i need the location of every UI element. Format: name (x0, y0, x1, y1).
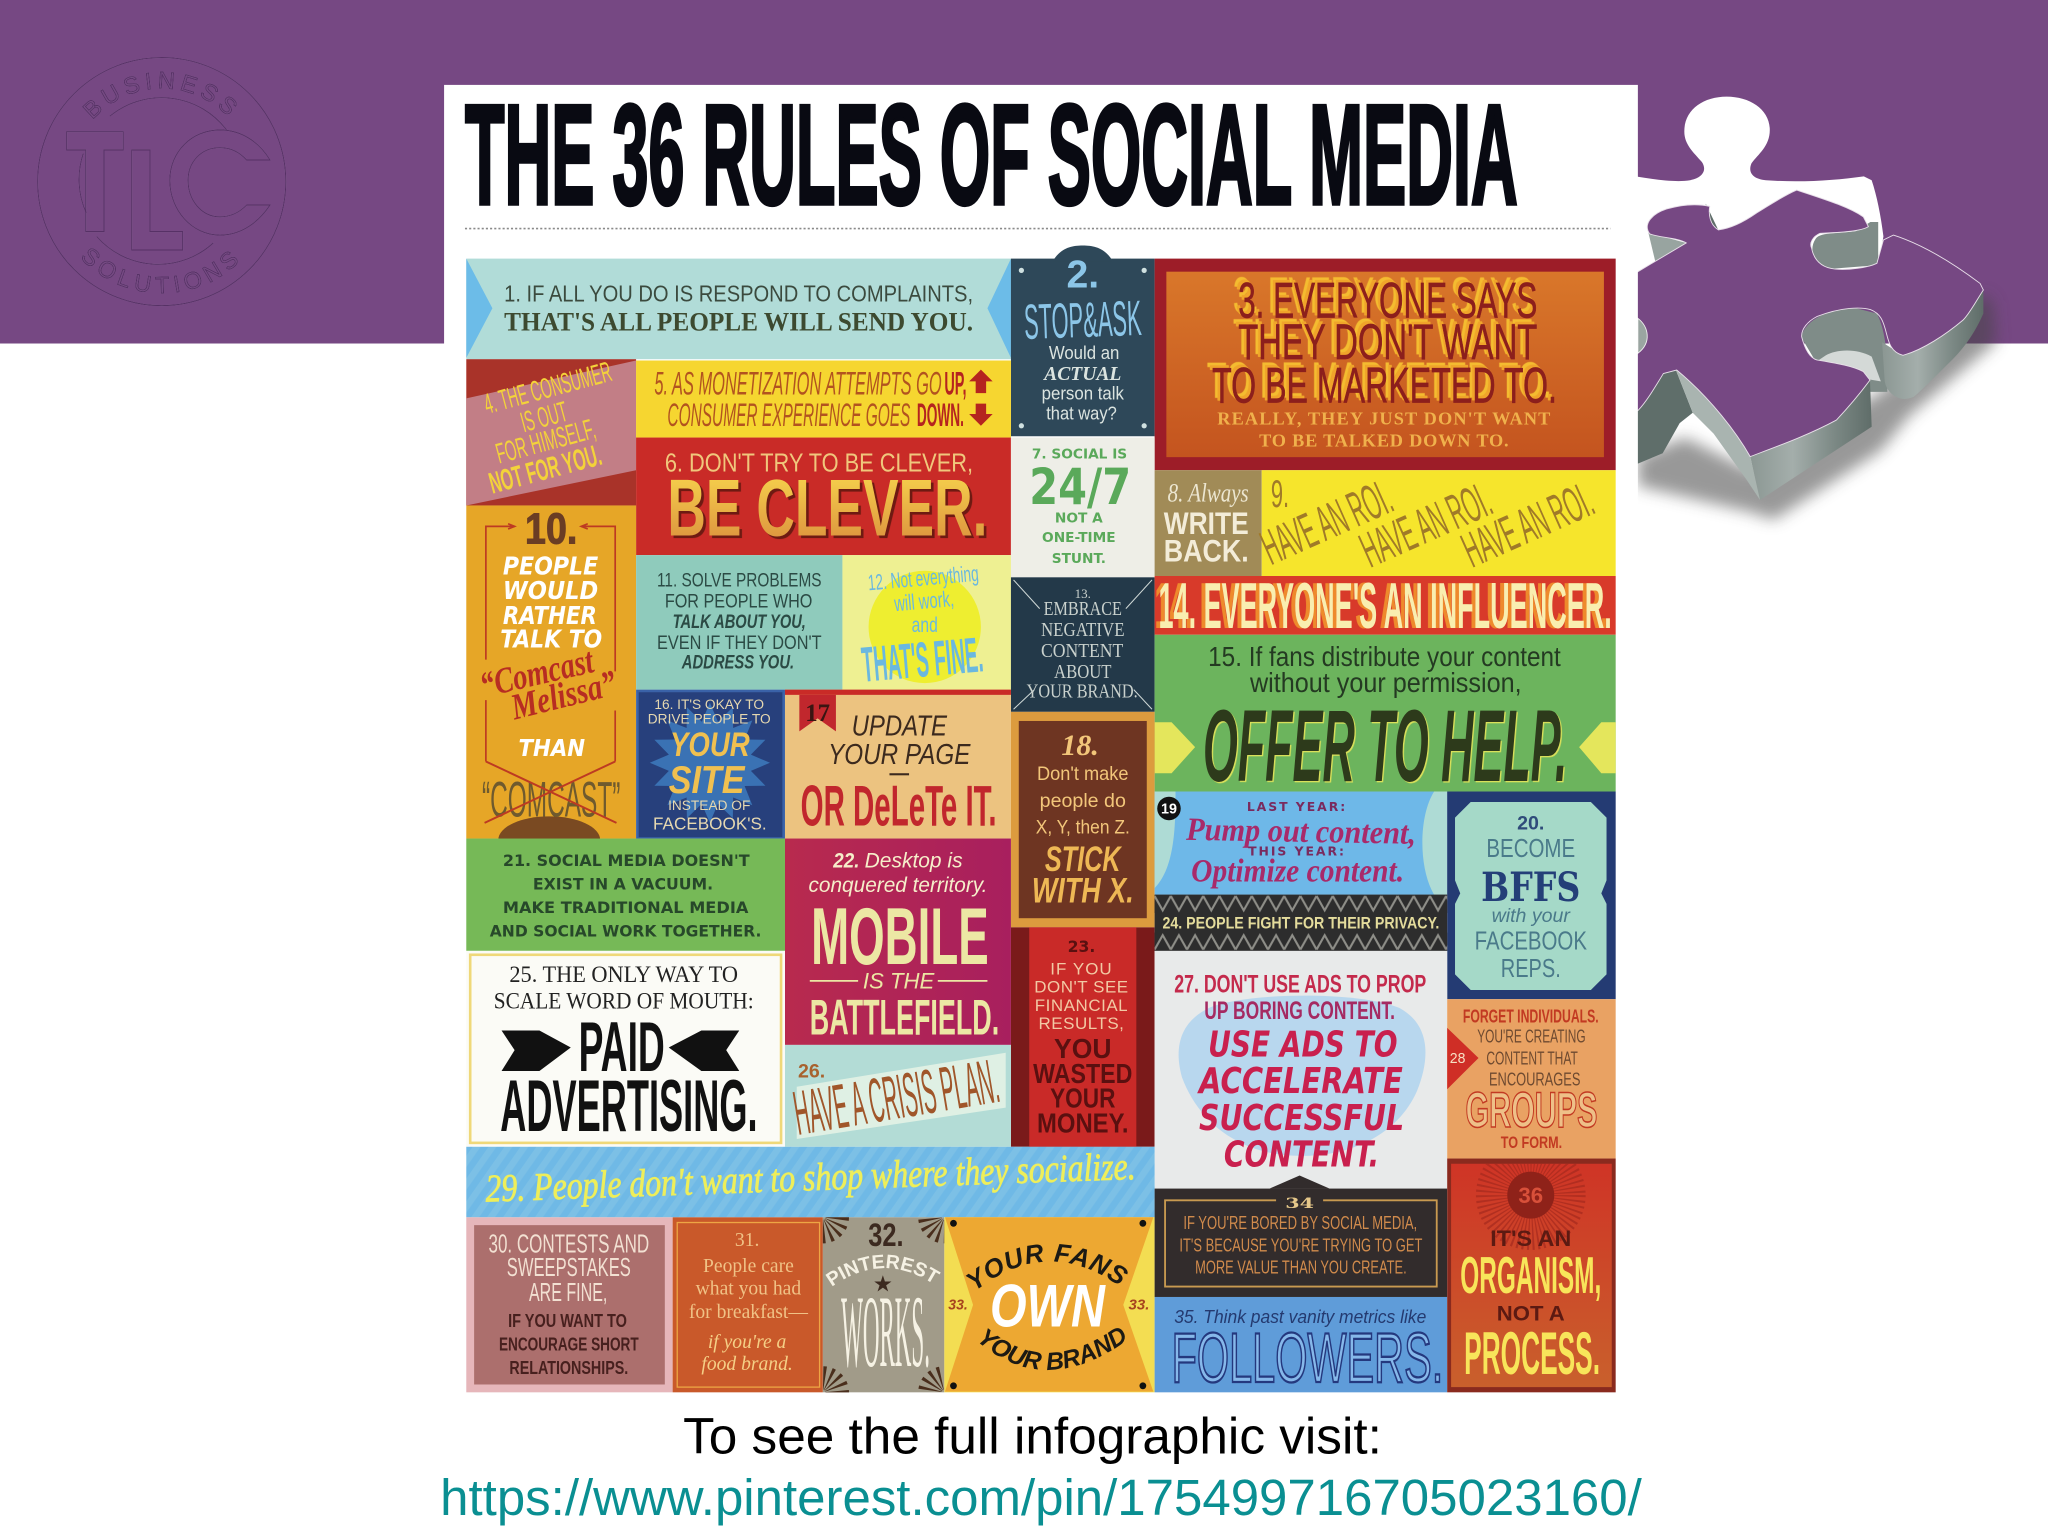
panel: rule 25: PAID (579, 1007, 665, 1086)
logo: embossed TLC Business Solutions: BUSINESS (82, 72, 236, 119)
panel: rule 35: FOLLOWERS. (1172, 1318, 1443, 1397)
panel: rule 21: 21. SOCIAL MEDIA DOESN'T (503, 851, 750, 870)
panel: rule 6 (636, 438, 1011, 555)
panel: rule 28: CONTENT THAT (1486, 1047, 1578, 1068)
panel: rule 7: 7. SOCIAL IS (1032, 446, 1127, 462)
panel: rule 30: IF YOU WANT TO (508, 1310, 627, 1331)
panel: rule 17: UPDATE (852, 710, 948, 742)
panel: rule 33 (944, 1217, 1155, 1392)
icon: 3D puzzle piece (1620, 97, 1996, 520)
panel: rule 11: EVEN IF THEY DON'T (657, 632, 822, 654)
panel: rule 3: 3. EVERYONE SAYS (1238, 272, 1537, 328)
panel: rule 13: 13. (1075, 586, 1091, 601)
panel: rule 9: HAVE AN ROI. (1253, 469, 1401, 576)
panel: rule 32: PINTEREST (826, 1254, 941, 1286)
panel: rule 6: 6. DON'T TRY TO BE CLEVER, (665, 448, 973, 478)
panel: rule 11: 11. SOLVE PROBLEMS (657, 569, 822, 591)
panel: rule 12: will work, (892, 586, 955, 616)
panel: rule 28: FORGET INDIVIDUALS. (1463, 1006, 1599, 1027)
panel: rule 3: TO BE MARKETED TO. (1212, 357, 1557, 413)
white slide panel (444, 85, 1638, 1536)
panel: rule 31: for breakfast— (689, 1302, 808, 1323)
panel: rule 4: 4. THE CONSUMER (481, 356, 615, 421)
panel: rule 10: Melissa” (506, 662, 620, 728)
panel: rule 34: IF YOU'RE BORED BY SOCIAL MEDIA, (1183, 1212, 1417, 1233)
panel: rule 3 (1155, 259, 1616, 470)
panel: rule 21 (466, 839, 785, 951)
panel: rule 21: AND SOCIAL WORK TOGETHER. (490, 921, 761, 940)
panel: rule 10: “COMCAST” (482, 771, 620, 827)
panel: rule 22: IS THE (863, 969, 935, 994)
panel: rule 18 (1011, 712, 1155, 927)
panel: rule 22: 22. (832, 849, 859, 872)
panel: rule 11: ADDRESS YOU. (681, 652, 794, 674)
panel: rule 16: INSTEAD OF (668, 798, 750, 813)
panel: rule 22: conquered territory. (808, 874, 987, 897)
text: OFFER TO HELP. (1203, 689, 1567, 803)
panel: rule 33: 33. (1128, 1296, 1149, 1313)
panel: rule 16: DRIVE PEOPLE TO (648, 712, 771, 727)
panel: rule 2: ACTUAL (1042, 364, 1121, 385)
panel: rule 2: that way? (1046, 402, 1117, 423)
panel: rule 2: 2. (1066, 253, 1099, 296)
panel: rule 2: Would an (1049, 342, 1119, 363)
panel: rule 18: 18. (1061, 729, 1099, 762)
panel: rule 28: TO FORM. (1501, 1133, 1562, 1152)
panel: rule 35: 35. Think past vanity metrics like (1174, 1306, 1426, 1327)
panel: rule 19: THIS YEAR: (1248, 844, 1346, 859)
panel: rule 27 (1155, 951, 1447, 1189)
panel: rule 36: IT'S AN (1490, 1226, 1571, 1251)
panel: rule 28: GROUPS (1465, 1082, 1597, 1138)
panel: rule 30: 30. CONTESTS AND (488, 1229, 649, 1259)
panel: rule 8: 8. Always (1168, 479, 1249, 508)
panel: rule 27: USE ADS TO (1208, 1025, 1398, 1066)
panel: rule 25 (466, 951, 785, 1147)
purple header band (0, 0, 2048, 344)
panel: rule 10: TALK TO (500, 624, 602, 653)
panel: rule 23: YOU (1054, 1033, 1112, 1064)
panel: rule 23: IF YOU (1050, 959, 1113, 978)
panel: rule 10: WOULD (503, 576, 598, 605)
panel: rule 10: PEOPLE (503, 552, 598, 581)
panel: rule 31: 31. (735, 1230, 759, 1251)
logo: embossed TLC Business Solutions (37, 57, 286, 306)
panel: rule 9 (1253, 469, 1616, 578)
panel: rule 22: BATTLEFIELD. (810, 989, 999, 1045)
panel: rule 10: THAN (519, 734, 585, 762)
panel: rule 9: 9. (1271, 473, 1289, 516)
panel: rule 34: 34 (1285, 1196, 1314, 1212)
panel: rule 23: RESULTS, (1039, 1014, 1124, 1033)
panel: rule 25: 25. THE ONLY WAY TO (509, 962, 738, 988)
panel: rule 10 (466, 505, 636, 840)
panel: rule 20: BECOME (1486, 833, 1575, 863)
poster grid (466, 246, 1616, 1397)
panel: rule 3: TO BE TALKED DOWN TO. (1259, 431, 1509, 451)
panel: rule 17: 17 (805, 700, 830, 727)
panel: rule 4: NOT FOR YOU. (486, 439, 605, 500)
panel: rule 4: FOR HIMSELF, (492, 413, 599, 470)
panel: rule 31: food brand. (701, 1354, 793, 1375)
panel: rule 18: Don't make (1037, 763, 1129, 785)
panel: rule 1: THAT'S ALL PEOPLE WILL SEND YOU. (504, 307, 973, 336)
panel: rule 12 (842, 555, 1011, 693)
panel: rule 28: ENCOURAGES (1489, 1068, 1580, 1089)
panel: rule 7 (1011, 438, 1155, 577)
panel: rule 35 (1155, 1297, 1447, 1397)
panel: rule 19: LAST YEAR: (1247, 799, 1347, 814)
panel: rule 27: CONTENT. (1224, 1134, 1379, 1175)
panel: rule 22 (785, 839, 1011, 1045)
panel: rule 27: UP BORING CONTENT. (1204, 998, 1395, 1025)
panel: rule 30: ARE FINE, (529, 1277, 607, 1307)
panel: rule 19: Optimize content. (1191, 854, 1404, 890)
panel: rule 36 (1447, 1156, 1616, 1392)
panel: rule 17 (785, 690, 1011, 839)
panel: rule 4: IS OUT (517, 396, 571, 439)
panel: rule 11 (636, 555, 842, 690)
poster grid: STOP&ASK (1023, 290, 1142, 350)
logo: embossed TLC Business Solutions: SOLUTIONS (82, 248, 238, 294)
panel: rule 10: “Comcast (476, 639, 598, 705)
panel: rule 8: WRITE (1164, 506, 1249, 541)
panel: rule 30: SWEEPSTAKES (507, 1252, 631, 1282)
panel: rule 23: MONEY. (1037, 1107, 1128, 1138)
panel: rule 16: FACEBOOK'S. (653, 813, 767, 833)
panel: rule 15: without your permission, (1249, 667, 1522, 698)
panel: rule 19: 19 (1161, 802, 1177, 818)
panel: rule 22: MOBILE (811, 892, 989, 982)
panel: rule 8 (1155, 470, 1262, 576)
panel: rule 16: YOUR (670, 726, 750, 764)
panel: rule 29: 29. People don't want to shop where they socialize. (485, 1145, 1136, 1211)
panel: rule 26: 26. (798, 1061, 825, 1083)
panel: rule 5: UP, (944, 364, 967, 401)
panel: rule 26 (785, 1045, 1011, 1149)
panel: rule 2: person talk (1042, 383, 1125, 404)
panel: rule 11: TALK ABOUT YOU, (673, 611, 806, 633)
panel: rule 23 (1011, 927, 1155, 1147)
panel: rule 23: YOUR (1050, 1083, 1116, 1114)
panel: rule 32 (822, 1216, 944, 1392)
panel: rule 1 (466, 259, 1011, 359)
panel: rule 16: SITE (669, 759, 746, 802)
panel: rule 15 (1155, 635, 1616, 803)
poster grid: THAT'S FINE. (859, 626, 985, 693)
panel: rule 13: YOUR BRAND. (1027, 681, 1138, 702)
panel: rule 32: ★ (874, 1273, 892, 1295)
panel: rule 20 (1447, 792, 1616, 999)
panel: rule 17: OR DeLeTe IT. (801, 774, 997, 838)
panel: rule 7: STUNT. (1052, 551, 1106, 567)
panel: rule 33: YOUR BRAND (980, 1328, 1125, 1370)
panel: rule 36: 36 (1518, 1183, 1543, 1208)
panel: rule 18: STICK (1045, 840, 1122, 879)
panel: rule 27: ACCELERATE (1197, 1061, 1403, 1102)
text: PROCESS. (1464, 1320, 1600, 1387)
panel: rule 34: MORE VALUE THAN YOU CREATE. (1195, 1256, 1407, 1277)
panel: rule 23: 23. (1068, 937, 1095, 956)
panel: rule 7: ONE-TIME (1042, 530, 1116, 546)
panel: rule 14 (1155, 569, 1616, 642)
panel: rule 23: FINANCIAL (1035, 996, 1128, 1015)
panel: rule 16 (636, 690, 785, 839)
panel: rule 7: 24/7 (1029, 458, 1131, 516)
panel: rule 18: X, Y, then Z. (1036, 816, 1130, 838)
panel: rule 27: 27. DON'T USE ADS TO PROP (1174, 972, 1426, 999)
panel: rule 17: YOUR PAGE (828, 739, 971, 771)
panel: rule 20: 20. (1517, 812, 1544, 834)
panel: rule 13: NEGATIVE (1041, 620, 1125, 641)
panel: rule 24: 24. PEOPLE FIGHT FOR THEIR PRIVACY. (1162, 914, 1439, 933)
panel: rule 12: and (912, 614, 938, 637)
footer caption: To see the full infographic visit: (683, 1408, 1382, 1465)
panel: rule 10: RATHER (503, 601, 597, 630)
panel: rule 3: REALLY, THEY JUST DON'T WANT (1217, 408, 1550, 428)
panel: rule 3: THEY DON'T WANT (1238, 314, 1537, 370)
panel: rule 19: Pump out content, (1185, 812, 1416, 852)
panel: rule 23: WASTED (1033, 1058, 1132, 1089)
panel: rule 21: MAKE TRADITIONAL MEDIA (503, 898, 749, 917)
panel: rule 10: 10. (525, 505, 577, 553)
panel: rule 25: SCALE WORD OF MOUTH: (494, 988, 754, 1014)
panel: rule 19 (1155, 792, 1447, 895)
panel: rule 16: 16. IT'S OKAY TO (654, 697, 764, 712)
panel: rule 9: HAVE AN ROI. (1454, 471, 1602, 578)
panel: rule 20: REPS. (1501, 953, 1561, 983)
panel: rule 6: BE CLEVER. (667, 464, 987, 554)
panel: rule 13: EMBRACE (1044, 599, 1122, 620)
panel: rule 24 (1155, 895, 1447, 951)
panel: rule 15: 15. If fans distribute your content (1208, 641, 1561, 672)
panel: rule 18: WITH X. (1032, 872, 1134, 911)
panel: rule 28: YOU'RE CREATING (1477, 1025, 1586, 1046)
panel: rule 8: BACK. (1164, 534, 1249, 569)
poster grid: WORKS. (841, 1275, 930, 1389)
panel: rule 5: CONSUMER EXPERIENCE GOES (667, 396, 910, 433)
panel: rule 9: HAVE AN ROI. (1352, 471, 1500, 578)
footer link: https://www.pinterest.com/pin/175499716705023160/ (440, 1469, 1643, 1526)
panel: rule 31 (673, 1217, 823, 1392)
panel: rule 28: 28 (1450, 1051, 1465, 1067)
panel: rule 4 (466, 356, 636, 505)
panel: rule 30 (466, 1217, 673, 1392)
panel: rule 5: DOWN. (917, 396, 964, 433)
panel: rule 2 (1011, 246, 1155, 436)
panel: rule 20: BFFS (1481, 863, 1580, 911)
panel: rule 13: ABOUT (1054, 662, 1112, 683)
panel: rule 34: IT'S BECAUSE YOU'RE TRYING TO GET (1179, 1234, 1422, 1255)
panel: rule 33: 33. (948, 1296, 968, 1313)
panel: rule 23: DON'T SEE (1034, 978, 1129, 997)
panel: rule 31: what you had (696, 1278, 801, 1299)
panel: rule 34 (1155, 1176, 1447, 1297)
panel: rule 7: NOT A (1055, 510, 1103, 526)
panel: rule 25: ADVERTISING. (500, 1066, 758, 1147)
poster grid: HAVE A CRISIS PLAN. (789, 1046, 1004, 1149)
panel: rule 5 (636, 360, 1011, 438)
panel: rule 31: if you're a (708, 1332, 787, 1353)
panel: rule 33: OWN (990, 1273, 1106, 1340)
panel: rule 31: People care (703, 1256, 794, 1277)
panel: rule 20: FACEBOOK (1475, 926, 1587, 956)
panel: rule 28 (1447, 999, 1616, 1159)
panel: rule 30: RELATIONSHIPS. (509, 1357, 628, 1378)
panel: rule 20: with your (1492, 905, 1571, 927)
panel: rule 5: 5. AS MONETIZATION ATTEMPTS GO (654, 364, 942, 401)
panel: rule 33: YOUR FANS (966, 1244, 1128, 1288)
panel: rule 22: Desktop is (865, 849, 963, 872)
panel: rule 32: 32. (868, 1216, 904, 1253)
panel: rule 27: SUCCESSFUL (1199, 1098, 1404, 1139)
panel: rule 13 (1011, 577, 1155, 712)
panel: rule 1: 1. IF ALL YOU DO IS RESPOND TO COMPLAINTS, (504, 281, 973, 307)
panel: rule 13: CONTENT (1041, 641, 1123, 662)
panel: rule 21: EXIST IN A VACUUM. (533, 874, 713, 893)
panel: rule 11: FOR PEOPLE WHO (665, 590, 812, 612)
panel: rule 12: 12. Not everything (867, 561, 980, 595)
panel: rule 36: NOT A (1497, 1302, 1565, 1325)
panel: rule 18: people do (1040, 790, 1126, 812)
panel: rule 36: ORGANISM, (1460, 1247, 1601, 1305)
panel: rule 30: ENCOURAGE SHORT (499, 1334, 639, 1355)
